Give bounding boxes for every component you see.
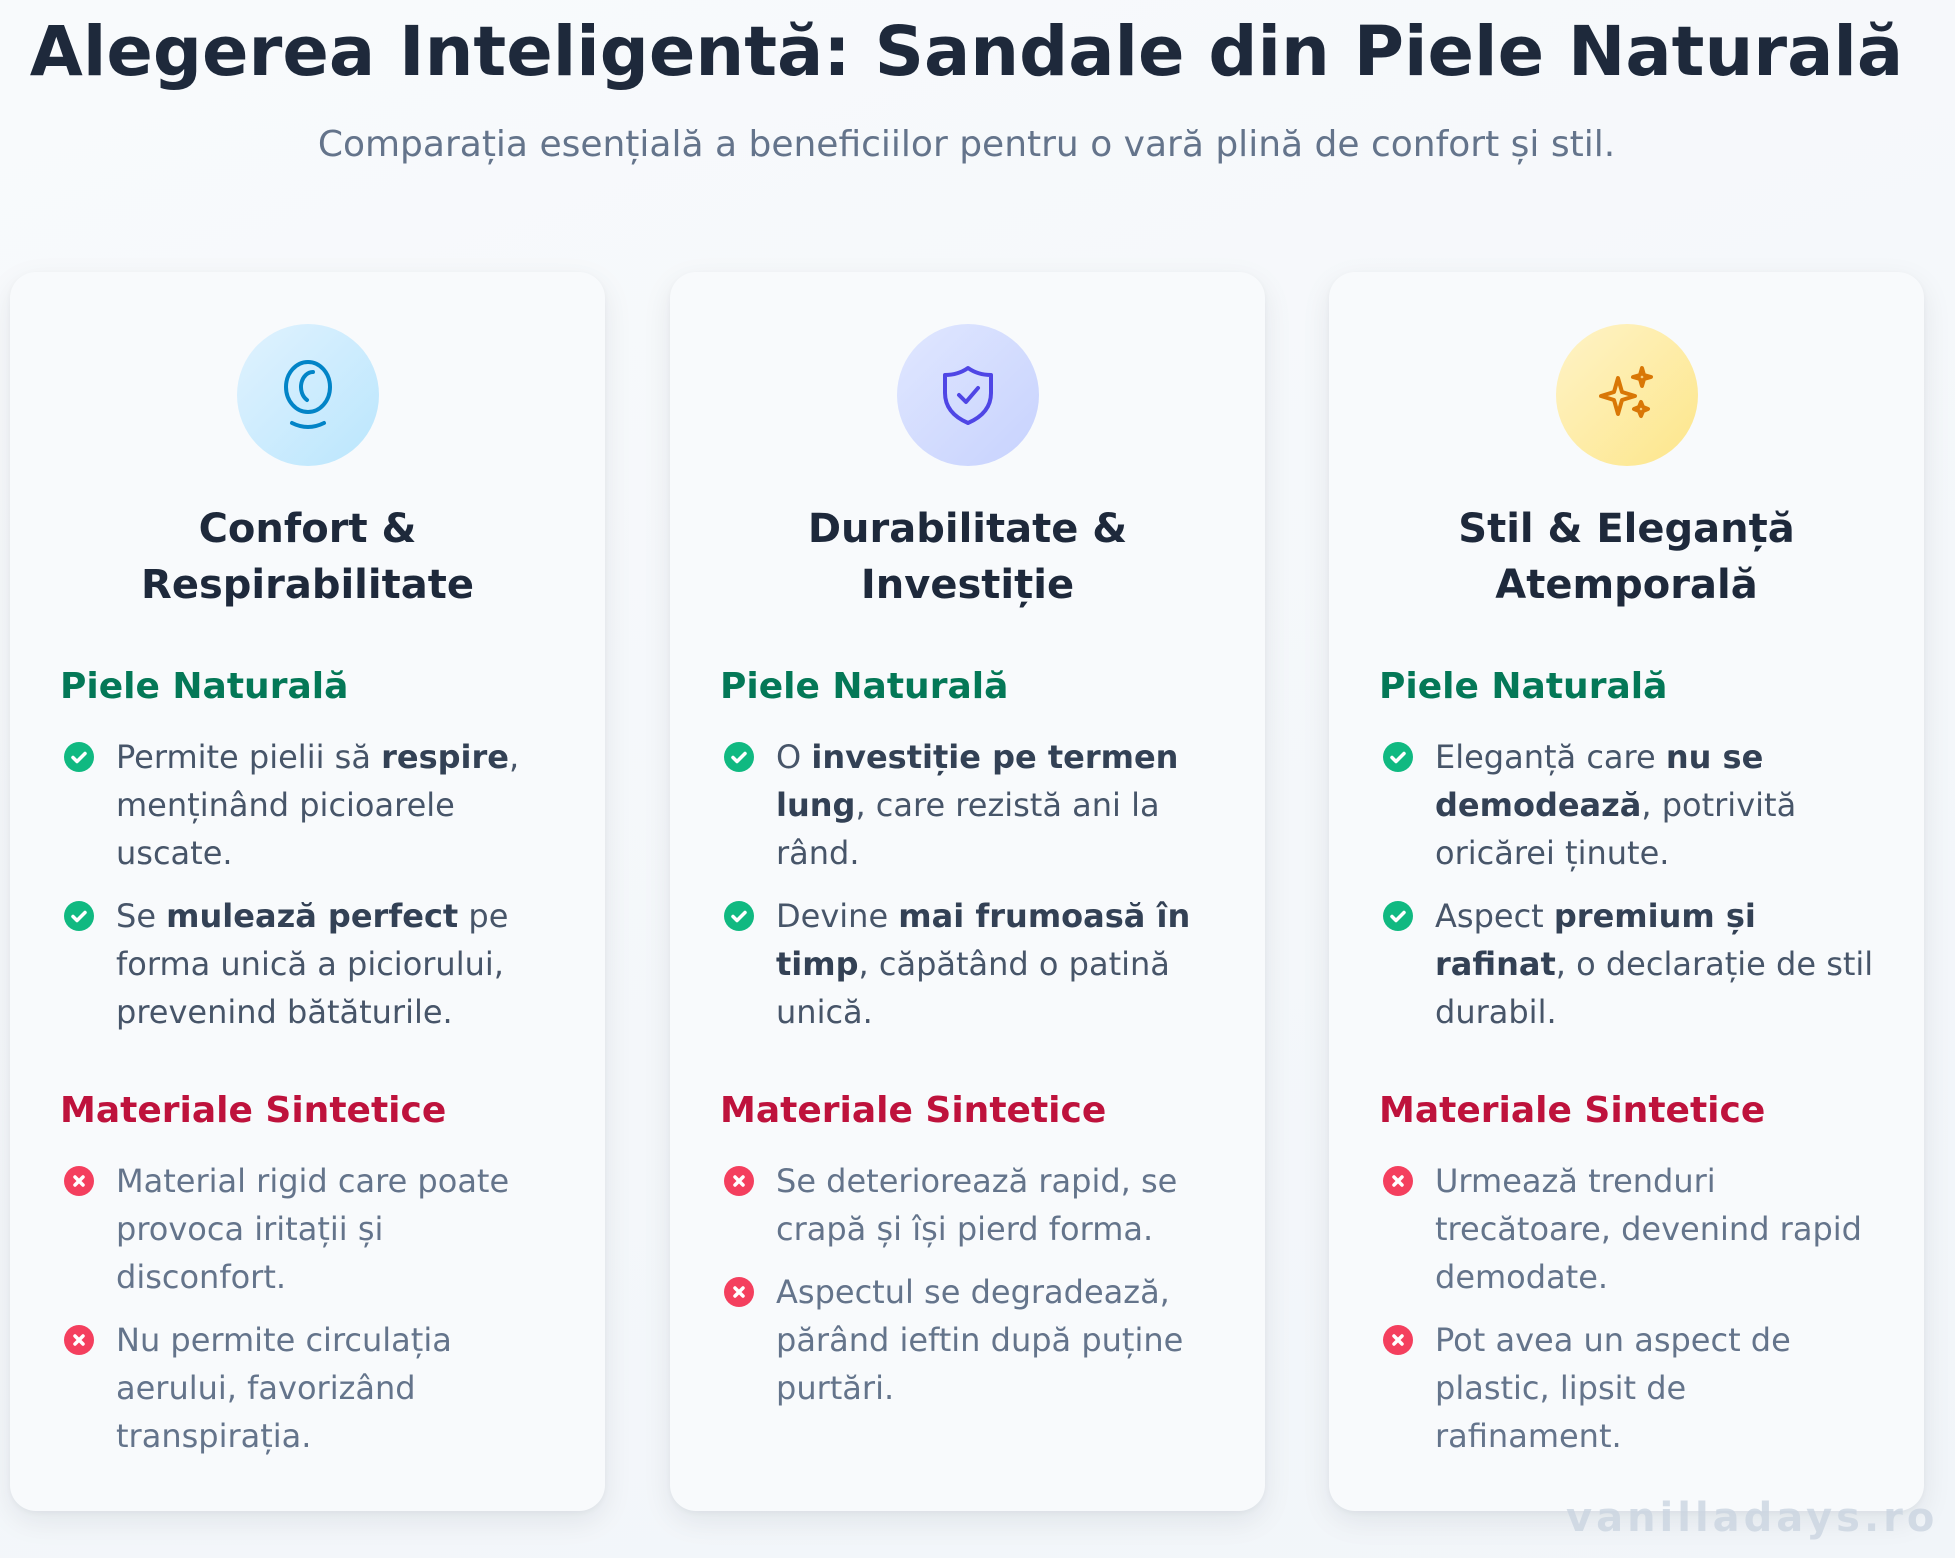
pros list [724, 738, 1190, 1031]
cons list [64, 1162, 509, 1455]
pros list [64, 738, 519, 1031]
heading [808, 506, 1127, 608]
heading: Stil & Eleganță [1458, 506, 1795, 552]
title: Alegerea Inteligentă: Sandale din Piele Naturală [30, 12, 1903, 92]
pros list: O investiție pe termen lung, care rezistă ani la rând. [776, 738, 1178, 872]
panel: style [1329, 272, 1924, 1511]
pros list: Eleganță care nu se demodează, potrivită oricărei ținute. [1435, 738, 1796, 872]
heading [1458, 506, 1795, 608]
section: natural: Piele Naturală [60, 666, 348, 707]
heading: Respirabilitate [141, 562, 474, 608]
heading: Durabilitate & [808, 506, 1127, 552]
cons list: Pot avea un aspect de plastic, lipsit de rafinament. [1435, 1321, 1791, 1455]
cons list: Material rigid care poate provoca iritații și disconfort. [116, 1162, 509, 1296]
subtitle: Comparația esențială a beneficiilor pentru o vară plină de confort și stil. [318, 124, 1615, 165]
section: natural: Piele Naturală [720, 666, 1008, 707]
icon: sparkles [1556, 324, 1698, 466]
heading: Investiție [861, 562, 1074, 608]
pros list: Aspect premium și rafinat, o declarație de stil durabil. [1435, 897, 1873, 1031]
heading: Confort & [199, 506, 416, 552]
heading: Atemporală [1495, 562, 1758, 608]
pros list: Permite pielii să respire, menținând picioarele uscate. [116, 738, 519, 872]
pros list: Se mulează perfect pe forma unică a piciorului, prevenind bătăturile. [116, 897, 508, 1031]
icon: comfort [236, 324, 378, 466]
cons list: Se deteriorează rapid, se crapă și își pierd forma. [776, 1162, 1177, 1248]
cons list [1383, 1162, 1862, 1455]
cons list: Nu permite circulația aerului, favorizând transpirația. [116, 1321, 452, 1455]
heading [141, 506, 474, 608]
cons list: Aspectul se degradează, părând ieftin după puține purtări. [776, 1273, 1183, 1407]
pros list: Devine mai frumoasă în timp, căpătând o patină unică. [776, 897, 1190, 1031]
cons list: Urmează trenduri trecătoare, devenind rapid demodate. [1435, 1162, 1862, 1296]
section: natural: Piele Naturală [1379, 666, 1667, 707]
panel: comfort [10, 272, 605, 1511]
section: synthetic: Materiale Sintetice [720, 1090, 1106, 1131]
section: synthetic: Materiale Sintetice [60, 1090, 446, 1131]
watermark: vanilladays.ro [1566, 1495, 1938, 1541]
pros list [1383, 738, 1873, 1031]
panel: durability [670, 272, 1265, 1511]
cons list [724, 1162, 1183, 1407]
section: synthetic: Materiale Sintetice [1379, 1090, 1765, 1131]
icon: shield [896, 324, 1038, 466]
